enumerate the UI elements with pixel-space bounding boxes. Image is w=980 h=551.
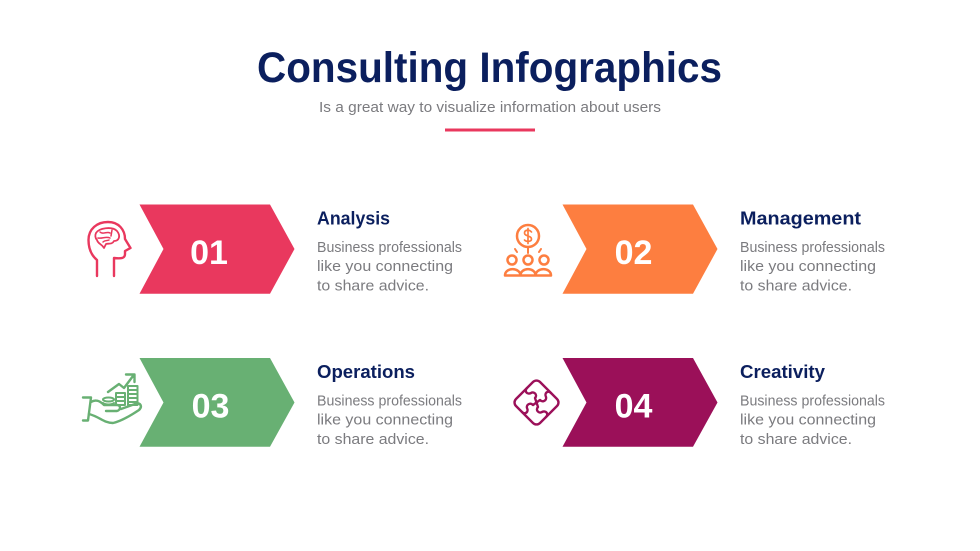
body text [317,392,462,448]
body text: Business professionals [740,392,885,410]
icon: puzzle diamond [512,378,561,427]
subtitle: Is a great way to visualize information about users [319,99,661,116]
body text [317,239,462,294]
body text: Business professionals [317,239,462,256]
title: Consulting Infographics [257,44,722,92]
chevron 03 [140,358,294,447]
body text: to share advice. [317,431,429,448]
number 02: 02 [615,234,652,272]
title underline [445,128,535,132]
body text: like you connecting [317,258,453,275]
chevron 02 [562,204,718,294]
heading: operations: Operations [317,361,415,382]
chevron 01 [140,204,294,294]
heading: analysis: Analysis [317,208,390,228]
number 03: 03 [192,388,229,426]
chevron 04 [562,358,718,447]
icon: hand with coins and arrow [83,374,141,423]
body text [740,392,885,448]
body text: Business professionals [740,239,885,256]
body text: like you connecting [740,258,876,275]
heading: management: Management [740,208,861,228]
icon: head with brain [88,222,130,276]
body text: Business professionals [317,392,462,410]
body text: to share advice. [740,431,852,448]
panel: analysis [88,204,462,294]
body text: to share advice. [317,278,429,294]
body text: to share advice. [740,278,852,294]
heading: creativity: Creativity [740,361,826,382]
panel: creativity [512,358,885,448]
number 01: 01 [190,234,228,272]
icon: people and dollar [505,225,551,276]
panel: management [505,204,885,294]
panel: operations [83,358,462,448]
body text: like you connecting [740,412,876,428]
number 04: 04 [615,388,652,426]
body text [740,239,885,294]
body text: like you connecting [317,412,453,428]
